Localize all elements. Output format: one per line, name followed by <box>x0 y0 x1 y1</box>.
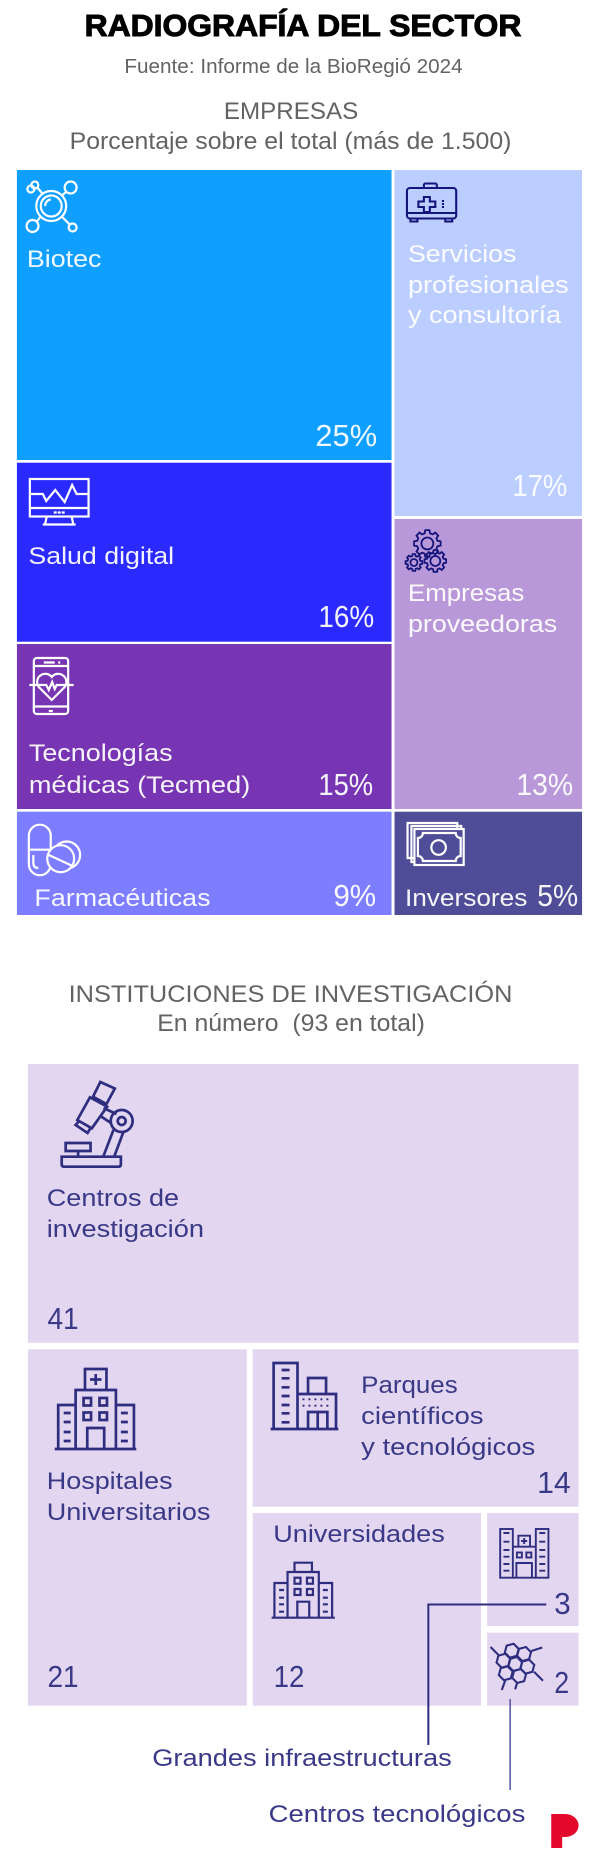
value: 14 <box>537 1465 571 1500</box>
icon: hexagon mesh <box>491 1642 543 1690</box>
icon: phone heart <box>29 658 74 714</box>
label: investigación <box>47 1216 204 1243</box>
panel: Hospitales Universitarios <box>28 1349 247 1706</box>
value: 16% <box>318 599 374 634</box>
panel: Farmacéuticas <box>17 812 392 915</box>
label: Salud digital <box>28 543 174 570</box>
panel: Servicios profesionales <box>395 170 582 516</box>
value: 41 <box>47 1301 79 1336</box>
label: científicos <box>361 1403 484 1430</box>
label <box>29 740 250 799</box>
icon: molecule lens <box>27 182 77 232</box>
icon: university building <box>272 1563 335 1618</box>
label <box>408 580 557 638</box>
value: 5% <box>537 878 578 913</box>
value: 21 <box>47 1659 79 1694</box>
icon: microscope <box>62 1082 133 1167</box>
panel: Salud digital <box>17 463 392 642</box>
panel: Universidades <box>253 1513 481 1706</box>
panel: Biotec <box>17 170 392 460</box>
label: y tecnológicos <box>361 1434 535 1461</box>
label: Servicios <box>408 241 516 268</box>
heading: instituciones <box>69 981 512 1037</box>
value: 2 <box>554 1665 569 1700</box>
icon: large facility <box>500 1529 548 1578</box>
panel: Empresas proveedoras <box>395 519 582 809</box>
callout label: centros tecnológicos: Centros tecnológicos <box>269 1801 525 1828</box>
label: Hospitales <box>47 1468 173 1495</box>
label: médicas (Tecmed) <box>29 772 250 799</box>
value: 15% <box>318 767 373 802</box>
label: proveedoras <box>408 611 557 638</box>
icon: gears <box>406 530 446 572</box>
label <box>408 241 569 329</box>
label: Farmacéuticas <box>34 885 211 912</box>
label: Centros de <box>47 1185 179 1212</box>
icon: hospital <box>55 1369 136 1449</box>
icon: monitor <box>30 479 89 524</box>
value: 17% <box>512 468 567 503</box>
label <box>47 1468 210 1526</box>
icon: first aid case <box>407 184 456 222</box>
label <box>361 1372 535 1461</box>
value: 12 <box>274 1659 304 1694</box>
heading: instituciones: INSTITUCIONES DE INVESTIGACIÓN <box>69 981 512 1008</box>
panel: Inversores <box>395 812 582 915</box>
panel: Centros de investigación <box>28 1064 579 1343</box>
label: Universitarios <box>47 1499 210 1526</box>
value: 3 <box>554 1586 571 1621</box>
heading: empresas: Porcentaje sobre el total (más de 1.500) <box>70 128 511 155</box>
callout line: centros tecnológicos <box>509 1699 511 1790</box>
value: 9% <box>333 878 376 913</box>
icon: pills <box>29 825 80 875</box>
label <box>47 1185 204 1243</box>
callout label: grandes infraestructuras: Grandes infraestructuras <box>152 1745 452 1772</box>
label: Parques <box>361 1372 458 1399</box>
label: Empresas <box>408 580 524 607</box>
label: Tecnologías <box>29 740 173 767</box>
callout line: grandes infraestructuras <box>428 1604 546 1745</box>
title: RADIOGRAFÍA DEL SECTOR <box>85 8 521 43</box>
panel: Centros tecnológicos <box>487 1633 579 1706</box>
panel: Parques científicos y tecnológicos <box>253 1349 579 1507</box>
label: Inversores <box>405 885 527 912</box>
panel: Grandes infraestructuras <box>487 1513 579 1626</box>
source line: Fuente: Informe de la BioRegió 2024 <box>124 56 463 78</box>
value: 13% <box>516 767 573 802</box>
label: Biotec <box>27 246 101 273</box>
label: y consultoría <box>408 302 562 329</box>
logo <box>551 1814 579 1848</box>
value: 25% <box>315 418 377 453</box>
heading: instituciones: En número (93 en total) <box>157 1010 425 1037</box>
heading: empresas: EMPRESAS <box>224 98 358 125</box>
panel: Tecnologías médicas <box>17 644 392 809</box>
icon: banknotes <box>408 823 464 865</box>
heading: empresas <box>70 98 511 155</box>
icon: buildings <box>271 1363 338 1429</box>
label: profesionales <box>408 272 569 299</box>
label: Universidades <box>273 1521 445 1548</box>
